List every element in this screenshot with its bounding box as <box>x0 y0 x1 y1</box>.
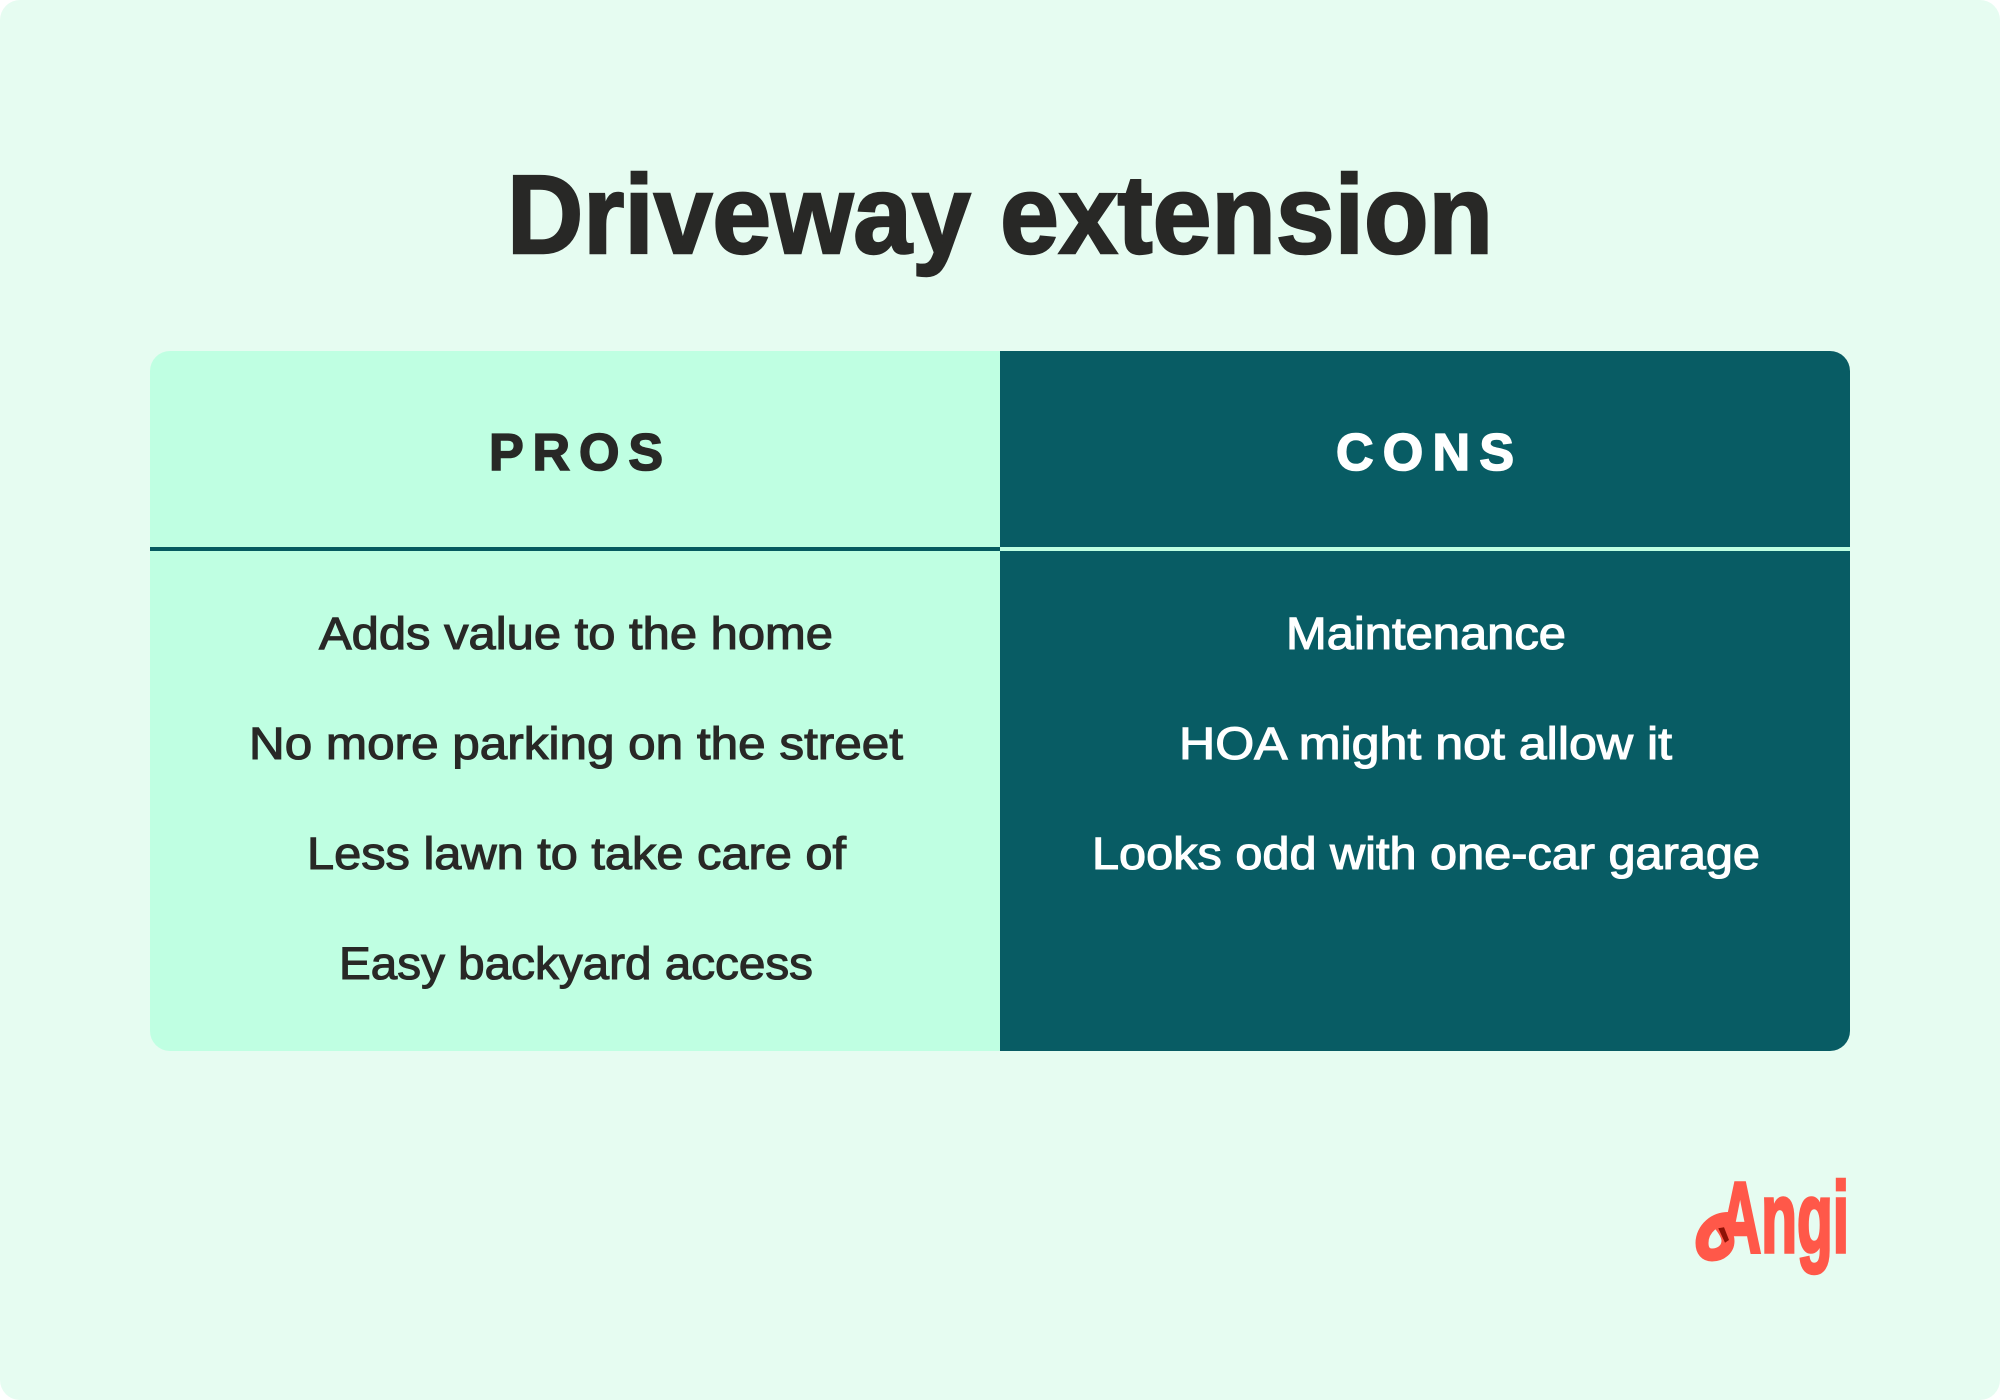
cons list <box>1092 608 1760 879</box>
panel: pros <box>150 351 1000 1051</box>
cons column background <box>1000 351 1850 1051</box>
con item: maintenance: Maintenance <box>1286 608 1566 659</box>
pro item: less lawn: Less lawn to take care of <box>307 828 847 879</box>
pro item: adds value: Adds value to the home <box>319 608 833 659</box>
logo: Angi <box>1702 1162 1849 1274</box>
title: Driveway extension <box>507 153 1493 277</box>
cons heading: CONS <box>1336 424 1514 482</box>
pro item: backyard access: Easy backyard access <box>339 938 813 989</box>
pros list <box>249 608 904 989</box>
logo: Angi: Angi <box>1719 1162 1849 1274</box>
pros heading: PROS <box>489 424 663 482</box>
panel: cons <box>1000 351 1850 1051</box>
pros column background <box>150 351 1000 1051</box>
con item: HOA: HOA might not allow it <box>1179 718 1673 769</box>
pro item: parking: No more parking on the street <box>249 718 904 769</box>
con item: one-car garage: Looks odd with one-car garage <box>1092 828 1760 879</box>
